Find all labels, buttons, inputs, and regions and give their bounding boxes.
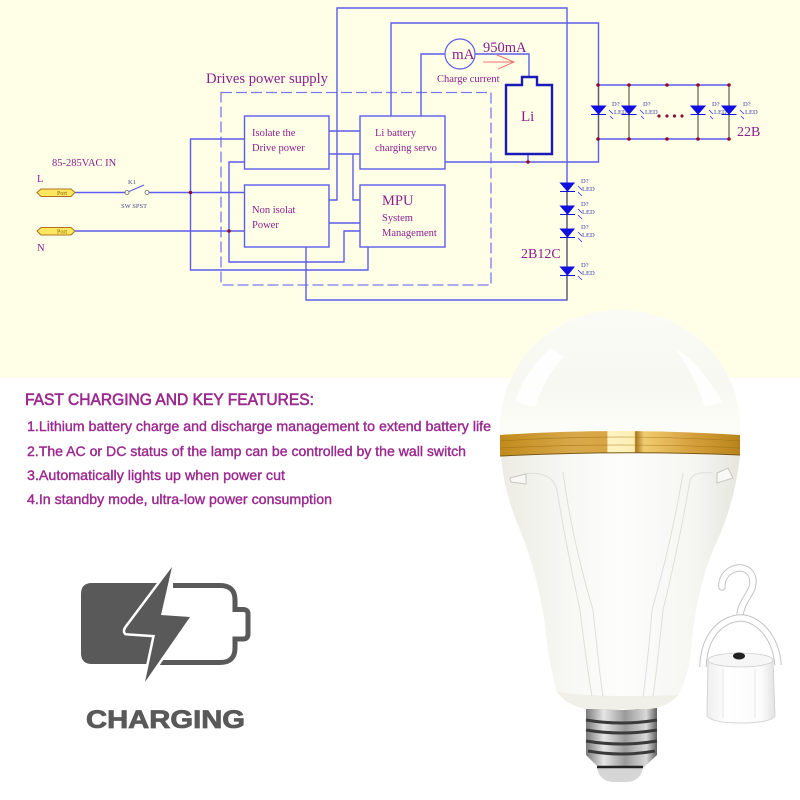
dome <box>500 310 740 436</box>
socket <box>586 708 657 782</box>
gold band <box>500 431 740 456</box>
push button <box>733 652 745 660</box>
background panel: schematic area <box>0 0 800 378</box>
hook arc <box>703 618 778 667</box>
icon: charging battery <box>81 567 248 682</box>
led array: 22B parallel: D? <box>612 101 620 108</box>
block: mpu system management: System <box>382 213 413 224</box>
port: N: Port <box>57 230 67 236</box>
switch K1: SW SPST <box>121 203 147 210</box>
body clips and seams <box>510 468 733 697</box>
block: non isolat power <box>244 185 329 247</box>
cylinder <box>707 660 775 723</box>
block: isolate the drive power <box>244 116 329 169</box>
wiring <box>75 8 729 300</box>
block: li battery charging servo: Li battery <box>375 128 417 139</box>
meter: mA <box>445 39 475 69</box>
led array: 22B parallel <box>591 101 758 119</box>
led column: 2B12C series: D? <box>581 201 589 208</box>
product: hanging hook holder <box>703 568 778 723</box>
switch K1: K1 <box>128 179 136 186</box>
block: isolate the drive power: Drive power <box>252 143 305 154</box>
arrow: charge current direction <box>483 55 514 69</box>
bulb body <box>501 452 740 710</box>
label: 2B12C: 2B12C <box>521 247 561 262</box>
port: L: Port <box>57 191 67 197</box>
block: mpu system management: Management <box>382 228 437 239</box>
feature 1: 1.Lithium battery charge and discharge management to extend battery life <box>27 418 491 434</box>
switch K1 <box>121 179 149 210</box>
led column: 2B12C series <box>560 178 595 280</box>
led column: 2B12C series: LED <box>582 209 595 216</box>
led column: 2B12C series: D? <box>581 178 589 185</box>
block: non isolat power: Non isolat <box>252 205 296 216</box>
led column: 2B12C series: D? <box>581 262 589 269</box>
bulb neck ring <box>557 692 678 709</box>
led array: 22B parallel: LED <box>614 109 627 116</box>
led column: 2B12C series: LED <box>582 232 595 239</box>
led column wires <box>567 85 729 300</box>
led column: 2B12C series: LED <box>582 270 595 277</box>
feature 2: 2.The AC or DC status of the lamp can be controlled by the wall switch <box>27 443 466 459</box>
label: drives power supply: Drives power supply <box>206 71 328 87</box>
label: N: N <box>37 243 45 254</box>
block: non isolat power: Power <box>252 220 279 231</box>
led column: 2B12C series: LED <box>582 186 595 193</box>
led array: 22B parallel: LED <box>645 109 658 116</box>
battery: Li: Li <box>521 109 534 125</box>
heading: fast charging and key features: FAST CHARGING AND KEY FEATURES: <box>25 391 314 409</box>
block: mpu system management <box>360 185 445 247</box>
label: charge current: Charge current <box>437 74 500 85</box>
led array: 22B parallel: D? <box>712 101 720 108</box>
block: mpu system management: MPU <box>382 193 414 209</box>
junction dots <box>189 83 731 233</box>
block: li battery charging servo: charging servo <box>375 143 437 154</box>
led array: 22B parallel: D? <box>743 101 751 108</box>
led array: 22B parallel: LED <box>745 109 758 116</box>
label: L: L <box>37 174 43 185</box>
block: isolate the drive power: Isolate the <box>252 128 296 139</box>
meter: mA: mA <box>452 47 475 63</box>
label: charging: CHARGING <box>86 706 245 734</box>
led array: 22B parallel: D? <box>643 101 651 108</box>
battery: Li <box>506 77 552 154</box>
led array: 22B parallel: LED <box>714 109 727 116</box>
port: N <box>37 228 75 236</box>
port: L <box>37 189 75 197</box>
feature 3: 3.Automatically lights up when power cut <box>27 467 285 483</box>
block: li battery charging servo <box>360 116 445 169</box>
label: 950mA: 950mA <box>483 40 527 56</box>
product: led bulb <box>500 310 740 782</box>
label: input voltage: 85-285VAC IN <box>52 158 117 169</box>
panel: circuit schematic <box>37 8 760 300</box>
feature 4: 4.In standby mode, ultra-low power consumption <box>27 491 332 507</box>
label: 22B: 22B <box>737 125 760 140</box>
led column: 2B12C series: D? <box>581 224 589 231</box>
feature list <box>27 418 491 507</box>
dashed box: drives power supply <box>221 92 491 285</box>
dome highlights <box>515 348 722 407</box>
hook <box>722 568 753 616</box>
